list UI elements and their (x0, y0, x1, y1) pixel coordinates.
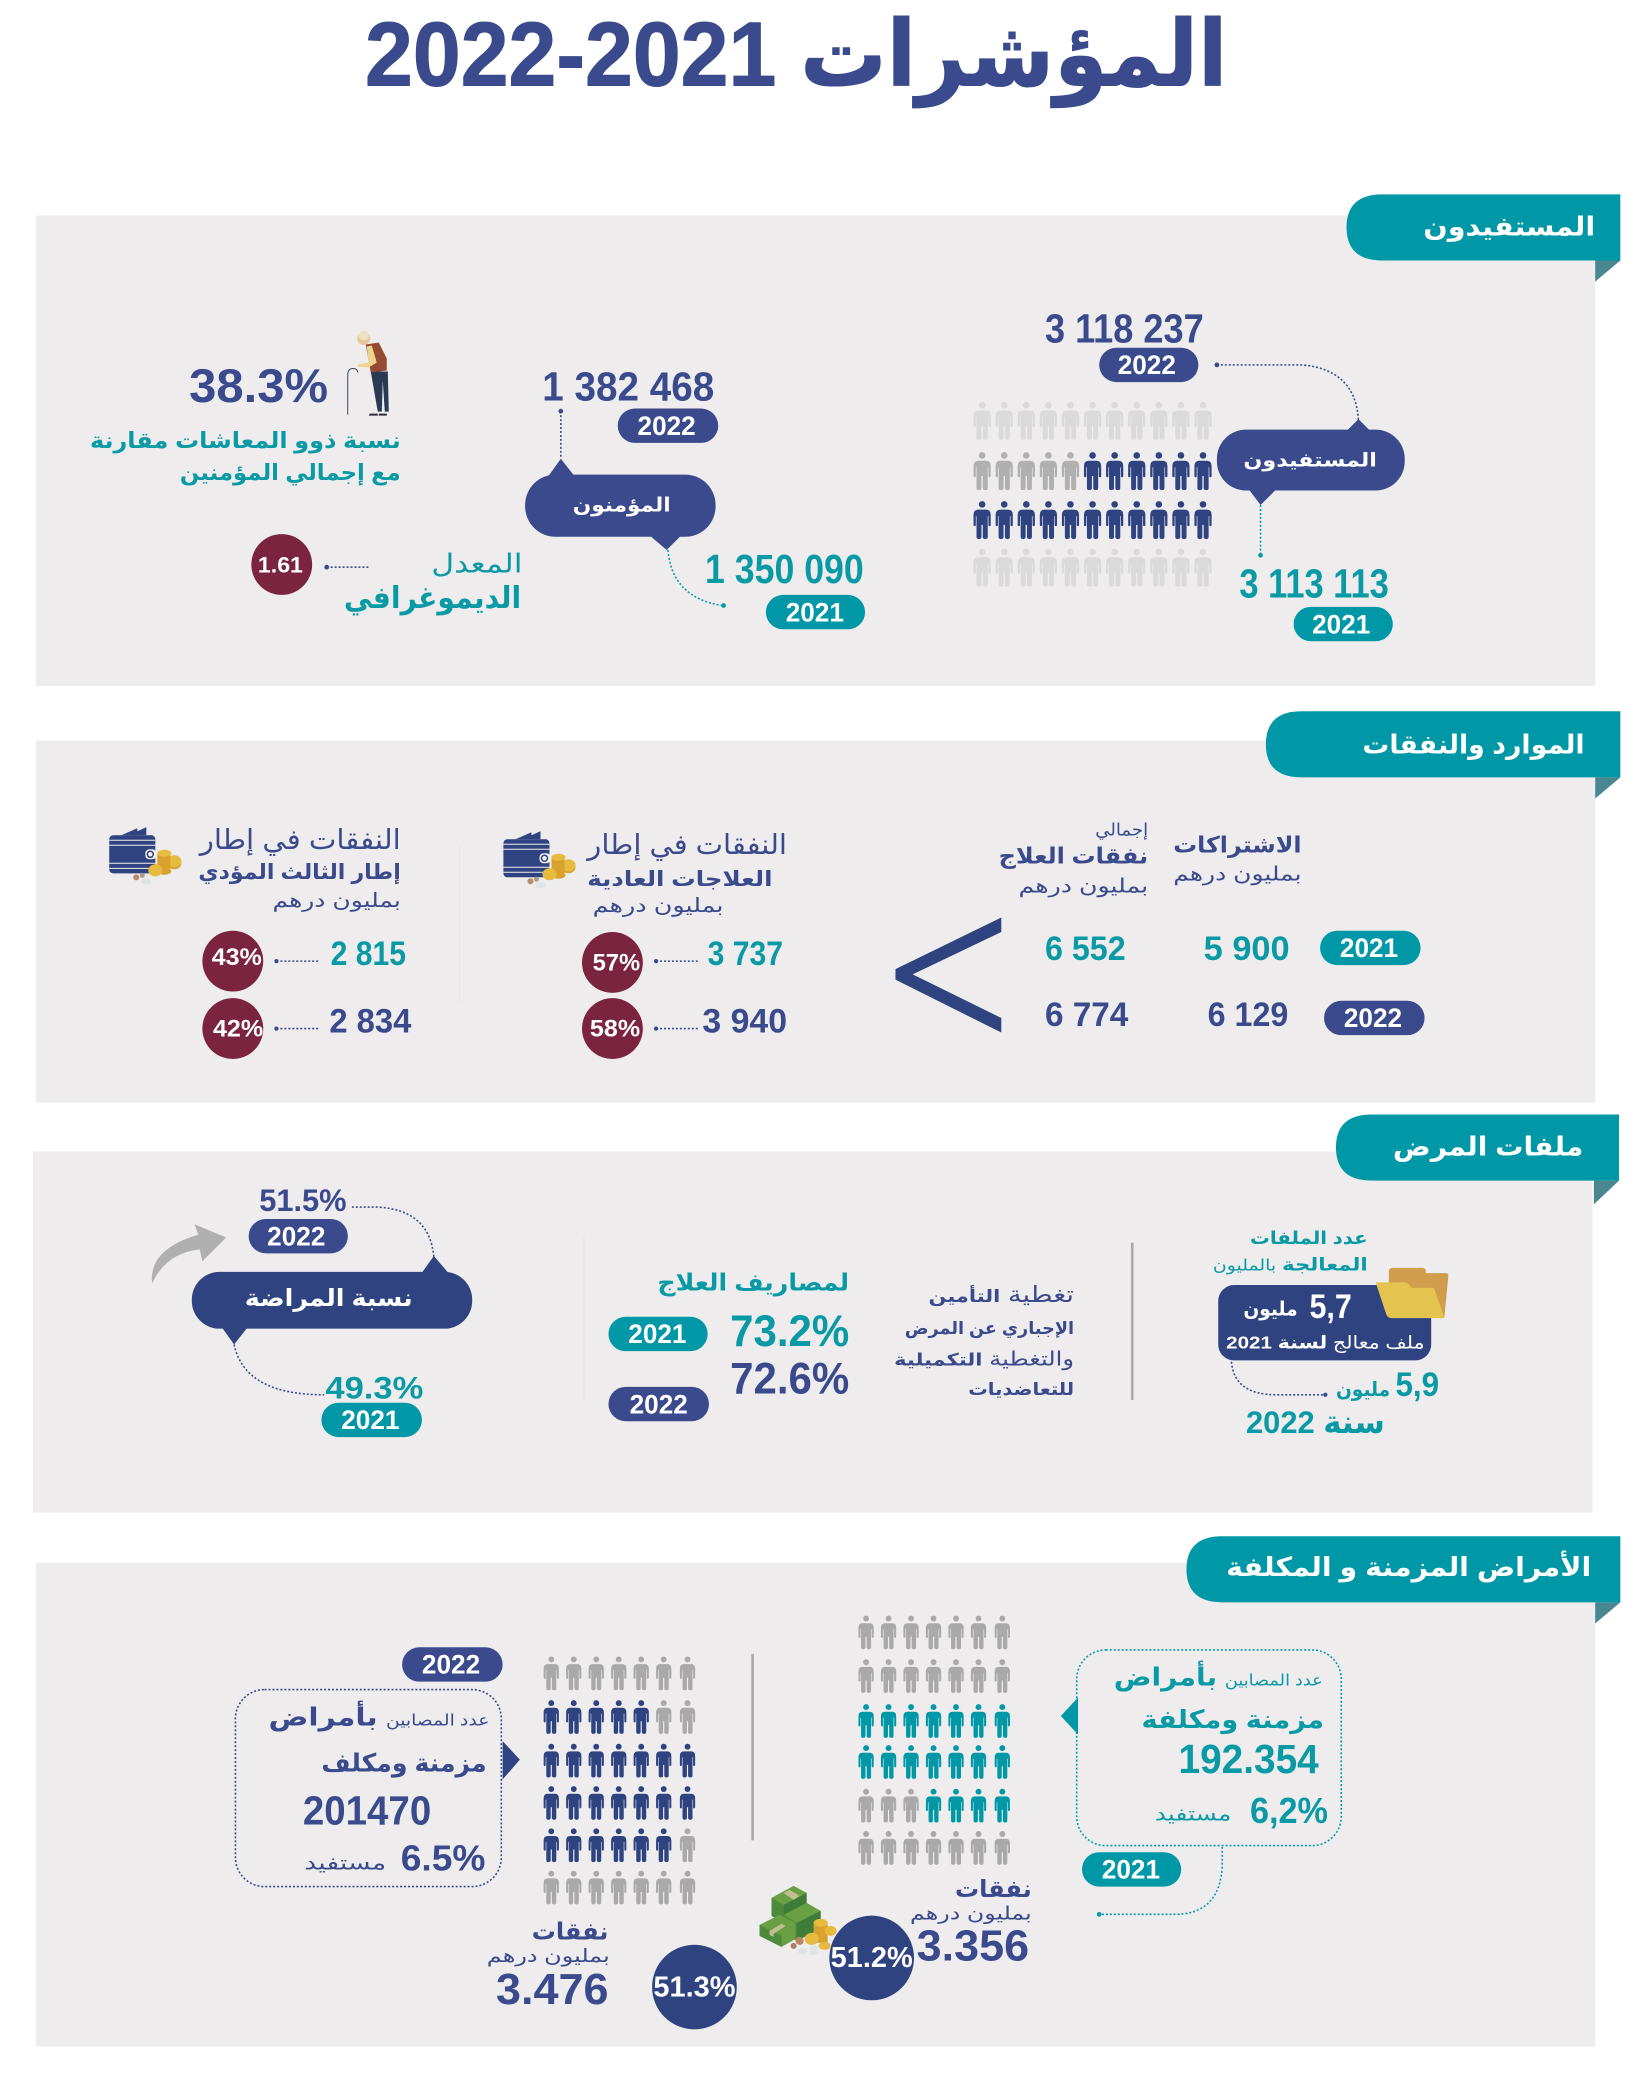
text: expenses 2021: نفقات (955, 1876, 1032, 1903)
row: 2022 values: 6 129 (1208, 996, 1288, 1034)
connector: 2022 to bubble (1215, 363, 1358, 420)
value: pensioners share: 38.3% (189, 360, 328, 413)
value: 73.2%: 73.2% (730, 1305, 849, 1356)
badge: 57%: 57% (593, 949, 640, 976)
divider (1131, 1243, 1134, 1400)
icon: folder (1376, 1268, 1448, 1318)
text: demographic ratio label (344, 548, 522, 616)
bubble: morbidity rate: نسبة المراضة (245, 1285, 413, 1312)
pill: 2021: 2021 (1102, 1855, 1160, 1885)
bubble: beneficiaries: المستفيدون (1243, 451, 1377, 472)
pill: 2022 (249, 1219, 348, 1253)
column header: contributions (1173, 833, 1302, 885)
text: processed files label (1213, 1228, 1368, 1276)
column header: third-party payer: بمليون درهم (272, 890, 401, 912)
panel: chronic and costly diseases (36, 1536, 1620, 2047)
connector and value: 2 815 (274, 935, 406, 973)
text: pensioners description (90, 428, 401, 486)
text: pensioners description: مع إجمالي المؤمنين (180, 460, 401, 486)
connector and value: 2 834: 2 834 (329, 1003, 411, 1041)
pill: 2021 (766, 595, 865, 629)
text: expenses 2022: نفقات (532, 1918, 608, 1945)
pill: 2022 (608, 1387, 709, 1421)
heading tab: illness files (1336, 1115, 1619, 1204)
heading tab: chronic diseases (1186, 1536, 1620, 1623)
text: expenses 2022: 3.476 (496, 1966, 608, 2014)
text: coverage description: للتعاضديات (968, 1379, 1074, 1399)
text: coverage description: الإجباري عن المرض (905, 1318, 1074, 1339)
pill: 2022: 2022 (267, 1221, 325, 1251)
heading tab: revenue and expenses: الموارد والنفقات (1362, 730, 1585, 761)
pill: 2022: 2022 (422, 1650, 480, 1680)
heading tab: illness files: ملفات المرض (1393, 1131, 1583, 1162)
value: 5,9 million files 2022: مليون (1336, 1379, 1390, 1401)
column header: ordinary treatments: النفقات في إطار (585, 829, 787, 861)
text: processed files label: المعالجة بالمليون (1213, 1255, 1368, 1276)
value: 5,9 million files 2022 (1246, 1366, 1439, 1440)
icon: old man with cane (348, 330, 389, 416)
pill: 2021 (1082, 1852, 1181, 1887)
column header: total treatment expenses: إجمالي (1095, 820, 1148, 841)
panel: illness files (33, 1115, 1619, 1512)
text: pensioners description: نسبة ذوو المعاشات مقارنة (90, 428, 401, 454)
box: 5,7 million files 2021 (1218, 1285, 1431, 1360)
pill: 2022 (1324, 1001, 1425, 1035)
pill: 2022 (618, 409, 718, 443)
row: 2021 values: 5 900 (1204, 930, 1290, 968)
divider (751, 1654, 754, 1840)
value: 49.3%: 49.3% (325, 1370, 423, 1406)
badge: 51.3% (652, 1945, 737, 2029)
text: coverage description: والتغطية التكميلية (894, 1349, 1074, 1371)
pill: 2021: 2021 (341, 1405, 399, 1435)
icon: wallet with coins (109, 827, 181, 884)
person grid: beneficiaries (974, 402, 1212, 587)
bubble: insured: المؤمنون (573, 495, 671, 517)
value: insured 2021: 1 350 090 (705, 546, 864, 592)
callout: 2021 chronic patients: 192.354 (1179, 1736, 1319, 1782)
pill: 2021 (1320, 931, 1421, 965)
pill: 2022: 2022 (1344, 1003, 1402, 1033)
box: 5,7 million files 2021: ملف معالج لسنة 2021 (1226, 1333, 1425, 1354)
callout: 2022 chronic patients (235, 1690, 520, 1887)
callout: 2022 chronic patients: مزمنة ومكلف (321, 1750, 487, 1779)
icon: gray growth arrow (152, 1224, 226, 1284)
badge: 43% (202, 931, 263, 992)
column header: ordinary treatments: بمليون درهم (593, 895, 724, 917)
column header: ordinary treatments (585, 829, 787, 917)
badge: 57% (582, 932, 643, 993)
column header: contributions: الاشتراكات (1173, 833, 1302, 859)
text: treatment expenses label: لمصاريف العلاج (657, 1269, 849, 1296)
connector and value: 2 834 (274, 1003, 411, 1041)
callout: 2022 chronic patients: 6.5% (401, 1839, 485, 1879)
badge: 51.2% (829, 1916, 914, 2000)
person grid: 2022 (544, 1657, 695, 1904)
value: insured 2022: 1 382 468 (542, 364, 714, 410)
pill: 2021: 2021 (1312, 609, 1370, 639)
badge: 58%: 58% (590, 1016, 640, 1042)
row: 2022 values (1045, 996, 1288, 1034)
connector: 2021 callout to expenses (1097, 1847, 1222, 1917)
icon: wallet with coins (503, 831, 576, 888)
badge: 51.2%: 51.2% (831, 1942, 913, 1974)
connector: insured 2022 (558, 409, 563, 457)
badge: demographic ratio: 1.61 (258, 552, 303, 577)
pill: 2021 (1294, 607, 1393, 641)
connector and value: 3 940: 3 940 (702, 1003, 787, 1041)
connector and value: 3 737 (654, 935, 783, 973)
value: 51.5%: 51.5% (259, 1182, 347, 1218)
text: demographic ratio label: الديموغرافي (344, 581, 521, 616)
badge: demographic ratio (251, 534, 312, 595)
callout: 2021 chronic patients: 6,2% (1250, 1791, 1328, 1831)
connector: demographic ratio (324, 565, 370, 570)
callout: 2021 chronic patients: مستفيد (1155, 1803, 1231, 1825)
icon: money stacks (760, 1886, 837, 1955)
heading tab: beneficiaries (1347, 194, 1620, 282)
column header: contributions: بمليون درهم (1173, 864, 1302, 885)
person grid: 2021 (858, 1616, 1010, 1865)
badge: 58% (582, 998, 643, 1059)
row: 2021 values: 6 552 (1045, 930, 1126, 968)
column header: third-party payer: إطار الثالث المؤدي (198, 861, 401, 885)
pill: 2021: 2021 (628, 1319, 686, 1349)
heading tab: beneficiaries: المستفيدون (1423, 211, 1595, 242)
connector and value: 3 940 (654, 1003, 787, 1041)
pill: 2021: 2021 (1340, 933, 1398, 963)
value: 5,9 million files 2022: سنة 2022 (1246, 1404, 1385, 1440)
box: 5,7 million files 2021: مليون (1243, 1298, 1298, 1320)
value: 5,9 million files 2022: 5,9 (1395, 1366, 1439, 1404)
row: 2021 values (1045, 930, 1290, 968)
badge: 42% (202, 998, 263, 1059)
text: expenses 2021: بمليون درهم (910, 1903, 1032, 1925)
heading tab: revenue and expenses (1266, 711, 1620, 799)
value: beneficiaries 2022: 3 118 237 (1045, 305, 1204, 351)
pill: 2022: 2022 (638, 411, 696, 441)
column header: third-party payer: النفقات في إطار (198, 824, 401, 856)
badge: 51.3%: 51.3% (653, 1971, 736, 2003)
callout: 2022 chronic patients: عدد المصابين بأمراض (269, 1700, 489, 1732)
badge: 42%: 42% (213, 1016, 263, 1042)
callout: 2021 chronic patients: عدد المصابين بأمراض (1114, 1661, 1323, 1693)
connector and value: 2 815: 2 815 (331, 935, 406, 973)
bubble: beneficiaries (1217, 419, 1405, 505)
pill: 2022 (402, 1647, 503, 1682)
callout: 2022 chronic patients: مستفيد (304, 1852, 386, 1874)
panel: revenue and expenses (36, 711, 1620, 1103)
column header: total treatment expenses: نفقات العلاج (999, 843, 1148, 869)
text: expenses 2021: 3.356 (917, 1923, 1029, 1971)
pill: 2022 (1099, 348, 1198, 382)
row: 2022 values: 6 774 (1045, 996, 1128, 1034)
panel: beneficiaries (36, 194, 1620, 686)
badge: 43%: 43% (212, 944, 262, 971)
title: المؤشرات 2021-2022 (365, 3, 1227, 108)
heading tab: chronic diseases: الأمراض المزمنة و المكلفة (1226, 1550, 1591, 1583)
pill: 2021 (321, 1403, 422, 1437)
text: expenses 2021 (910, 1876, 1032, 1971)
connector: insured 2021 (668, 550, 726, 608)
text: coverage description: تغطية التأمين (929, 1282, 1074, 1307)
callout: 2021 chronic patients (1061, 1650, 1341, 1846)
callout: 2022 chronic patients: 201470 (303, 1787, 431, 1833)
connector and value: 3 737: 3 737 (708, 935, 783, 973)
callout: 2021 chronic patients: مزمنة ومكلفة (1142, 1706, 1324, 1735)
text: coverage description (894, 1282, 1074, 1399)
text: expenses 2022: بمليون درهم (487, 1945, 610, 1967)
pill: 2021 (608, 1317, 708, 1351)
pill: 2022: 2022 (1118, 350, 1176, 380)
bubble: insured (525, 459, 716, 550)
column header: ordinary treatments: العلاجات العادية (587, 868, 772, 891)
text: processed files label: عدد الملفات (1250, 1228, 1368, 1248)
column header: total treatment expenses: بمليون درهم (1018, 875, 1148, 897)
connector: morbidity 2021 (234, 1345, 324, 1395)
value: 72.6%: 72.6% (730, 1352, 849, 1403)
connector: morbidity 2022 (352, 1207, 434, 1257)
text: demographic ratio label: المعدل (431, 548, 522, 578)
icon: chevron less-than (895, 918, 1001, 1033)
pill: 2022: 2022 (630, 1389, 688, 1419)
connector: 2021 to 2022 files (1231, 1362, 1327, 1397)
column header: third-party payer (198, 824, 401, 912)
box: 5,7 million files 2021: 5,7 (1309, 1288, 1352, 1326)
column header: total treatment expenses (999, 820, 1148, 897)
bubble: morbidity rate (192, 1256, 472, 1345)
text: expenses 2022 (487, 1918, 610, 2014)
connector: bubble to 2021 (1258, 505, 1263, 558)
value: beneficiaries 2021: 3 113 113 (1239, 561, 1389, 607)
pill: 2021: 2021 (786, 597, 844, 627)
